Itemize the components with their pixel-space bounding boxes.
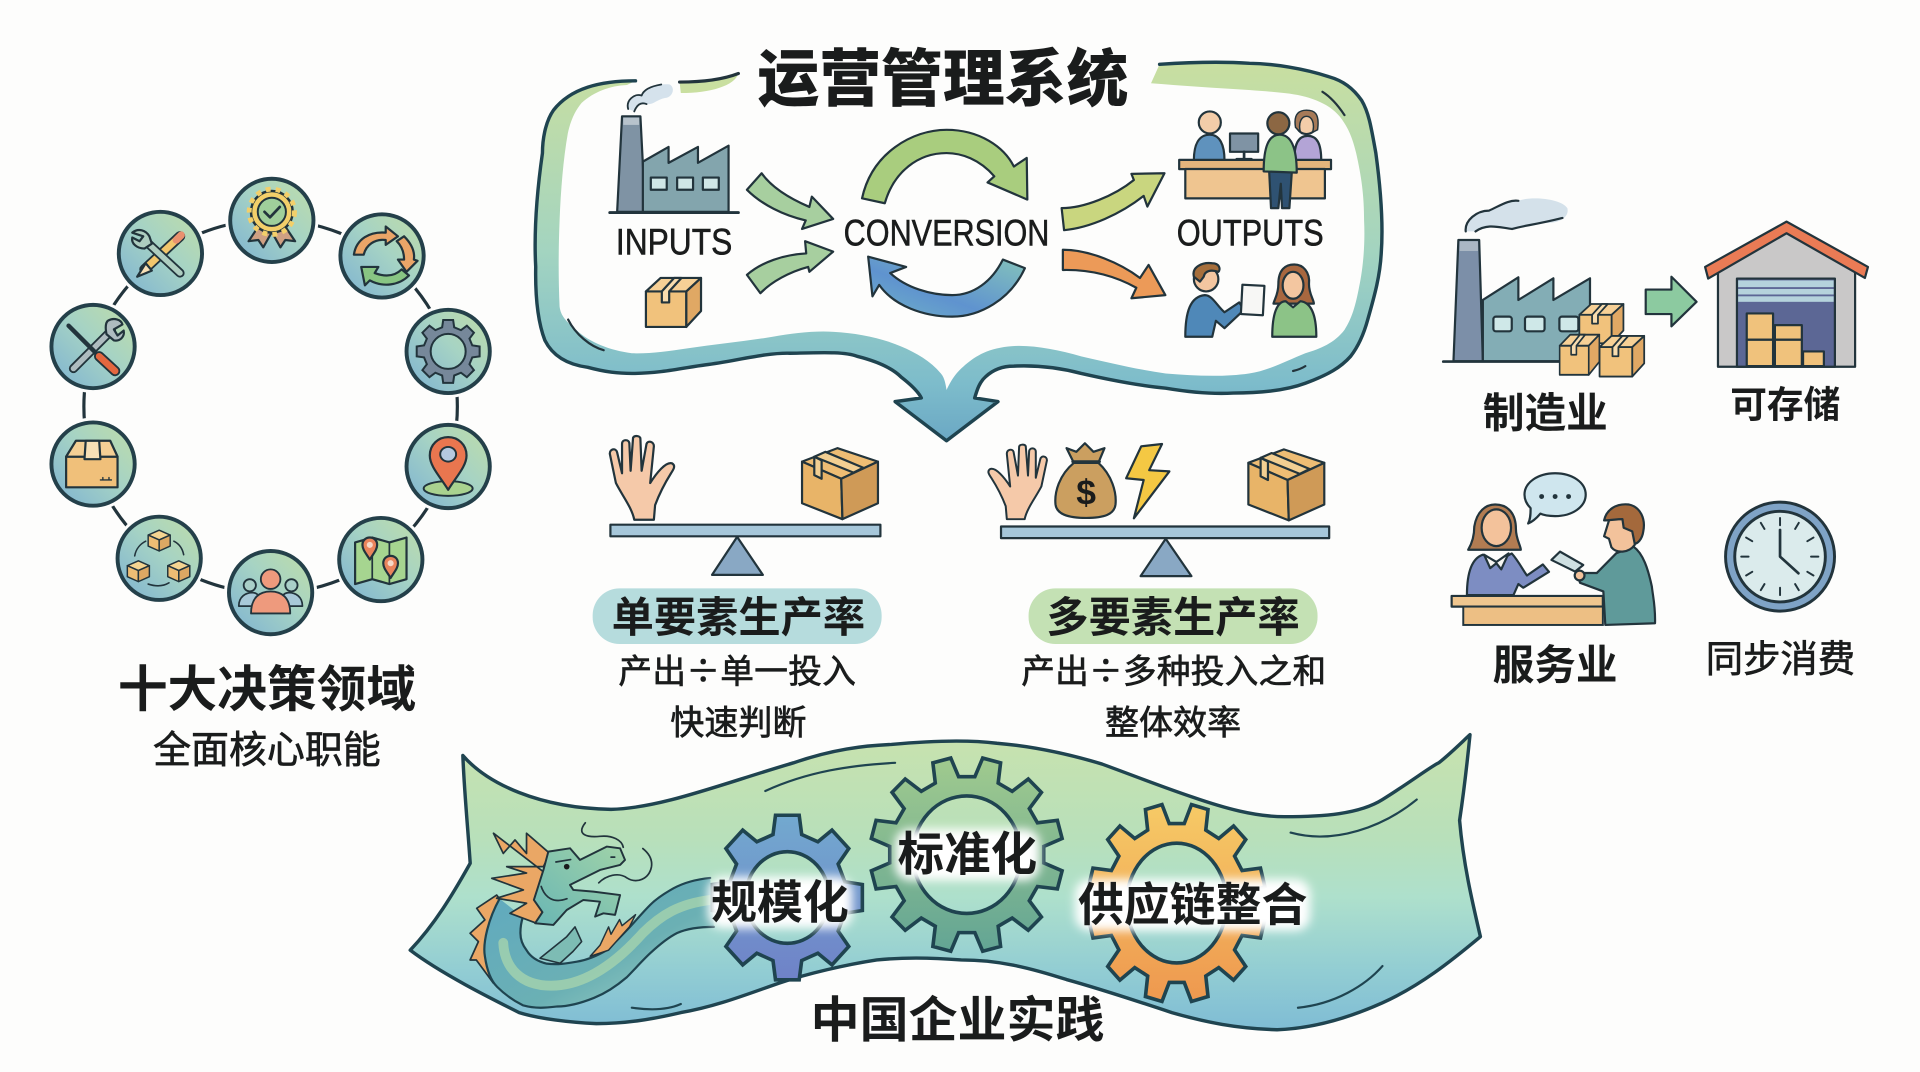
- panel: single factor productivity: [593, 436, 882, 743]
- balance scale beam: [1001, 527, 1329, 538]
- icon: gear: [402, 305, 495, 398]
- icon: cardboard box: [47, 418, 140, 511]
- label: supply chain integration: 供应链整合: [1078, 879, 1307, 931]
- icon: wrench and pencil: [114, 207, 207, 300]
- icon: map with pins: [334, 513, 427, 606]
- icon: location pin: [402, 420, 495, 513]
- gear: scale: [712, 815, 862, 980]
- ring connector: [84, 220, 457, 593]
- icon: hand mirrored: [988, 445, 1047, 519]
- banner ribbon: [410, 735, 1480, 1030]
- label halos: [708, 829, 1310, 931]
- arrow: to goods output: [1062, 173, 1164, 230]
- note: quick judgment: 快速判断: [670, 705, 806, 743]
- arrow: input to conversion top: [747, 173, 833, 229]
- icon: dragon: [470, 823, 714, 1008]
- label pill: [1029, 588, 1318, 644]
- arrow: input to conversion bottom: [747, 241, 833, 293]
- label: conversion: CONVERSION: [844, 213, 1049, 254]
- icon: factory with goods: [1443, 198, 1644, 377]
- icon: output box: [1248, 449, 1324, 520]
- label: services: 服务业: [1493, 642, 1618, 689]
- label: manufacturing: 制造业: [1483, 389, 1608, 436]
- heading: ten decision areas: 十大决策领域: [118, 662, 416, 718]
- formula: output over single input: 产出÷单一投入: [618, 644, 856, 693]
- icon: money bag: [1055, 443, 1116, 518]
- icon: quality medal: [225, 174, 318, 267]
- gear: supply chain integration: [1089, 805, 1265, 1001]
- icon: factory inputs: [610, 84, 738, 213]
- icon: warehouse: [1705, 222, 1868, 367]
- icon: service customers: [1185, 263, 1316, 337]
- title: 运营管理系统: [757, 45, 1128, 114]
- icon: energy bolt: [1126, 444, 1169, 518]
- label: scale: 规模化: [711, 876, 849, 928]
- heading: single factor productivity: 单要素生产率: [612, 594, 865, 641]
- balance scale beam: [610, 525, 880, 536]
- icon: people group: [224, 546, 317, 639]
- arrow: to service output: [1063, 250, 1165, 298]
- formula: output over total inputs: 产出÷多种投入之和: [1021, 644, 1326, 693]
- icon: hand: [610, 436, 674, 520]
- panel: china enterprise practice banner: [410, 735, 1480, 1048]
- panel: ten decision areas ring: [47, 174, 495, 772]
- panel: operations management system: [535, 45, 1382, 441]
- arrow: conversion loop top: [862, 130, 1027, 203]
- label: outputs: OUTPUTS: [1177, 213, 1324, 254]
- icon: service counter staff: [1179, 110, 1331, 208]
- label pill: [593, 588, 882, 644]
- icon: output box: [802, 448, 878, 519]
- caption: china enterprise practice: 中国企业实践: [811, 994, 1104, 1048]
- label: inputs: INPUTS: [616, 222, 732, 263]
- icon: money bag: $: [1076, 472, 1096, 512]
- icon: screwdriver and wrench: [47, 300, 140, 393]
- label: simultaneous consumption: 同步消费: [1706, 638, 1855, 680]
- panel: manufacturing vs services: [1443, 198, 1868, 689]
- subheading: core functions: 全面核心职能: [153, 730, 381, 772]
- icon: process cycle: [336, 209, 429, 302]
- heading: multi factor productivity: 多要素生产率: [1046, 594, 1300, 641]
- gear: standardization: [871, 758, 1062, 951]
- label: storable: 可存储: [1730, 385, 1840, 426]
- icon: input box: [646, 278, 701, 327]
- arrow: conversion loop bottom: [868, 257, 1025, 317]
- curly frame with down arrow: [535, 62, 1382, 441]
- label: standardization: 标准化: [898, 829, 1037, 881]
- icon: service interaction: [1452, 473, 1655, 625]
- balance fulcrum: [712, 537, 763, 575]
- ribbon accent strokes: [632, 763, 1417, 1009]
- icon: clock: [1726, 502, 1835, 611]
- icon: inventory cubes: [113, 512, 206, 605]
- arrow: manufacturing to storage: [1646, 277, 1697, 326]
- balance fulcrum: [1141, 539, 1191, 576]
- panel: multi factor productivity: [988, 443, 1329, 743]
- note: overall efficiency: 整体效率: [1105, 705, 1241, 743]
